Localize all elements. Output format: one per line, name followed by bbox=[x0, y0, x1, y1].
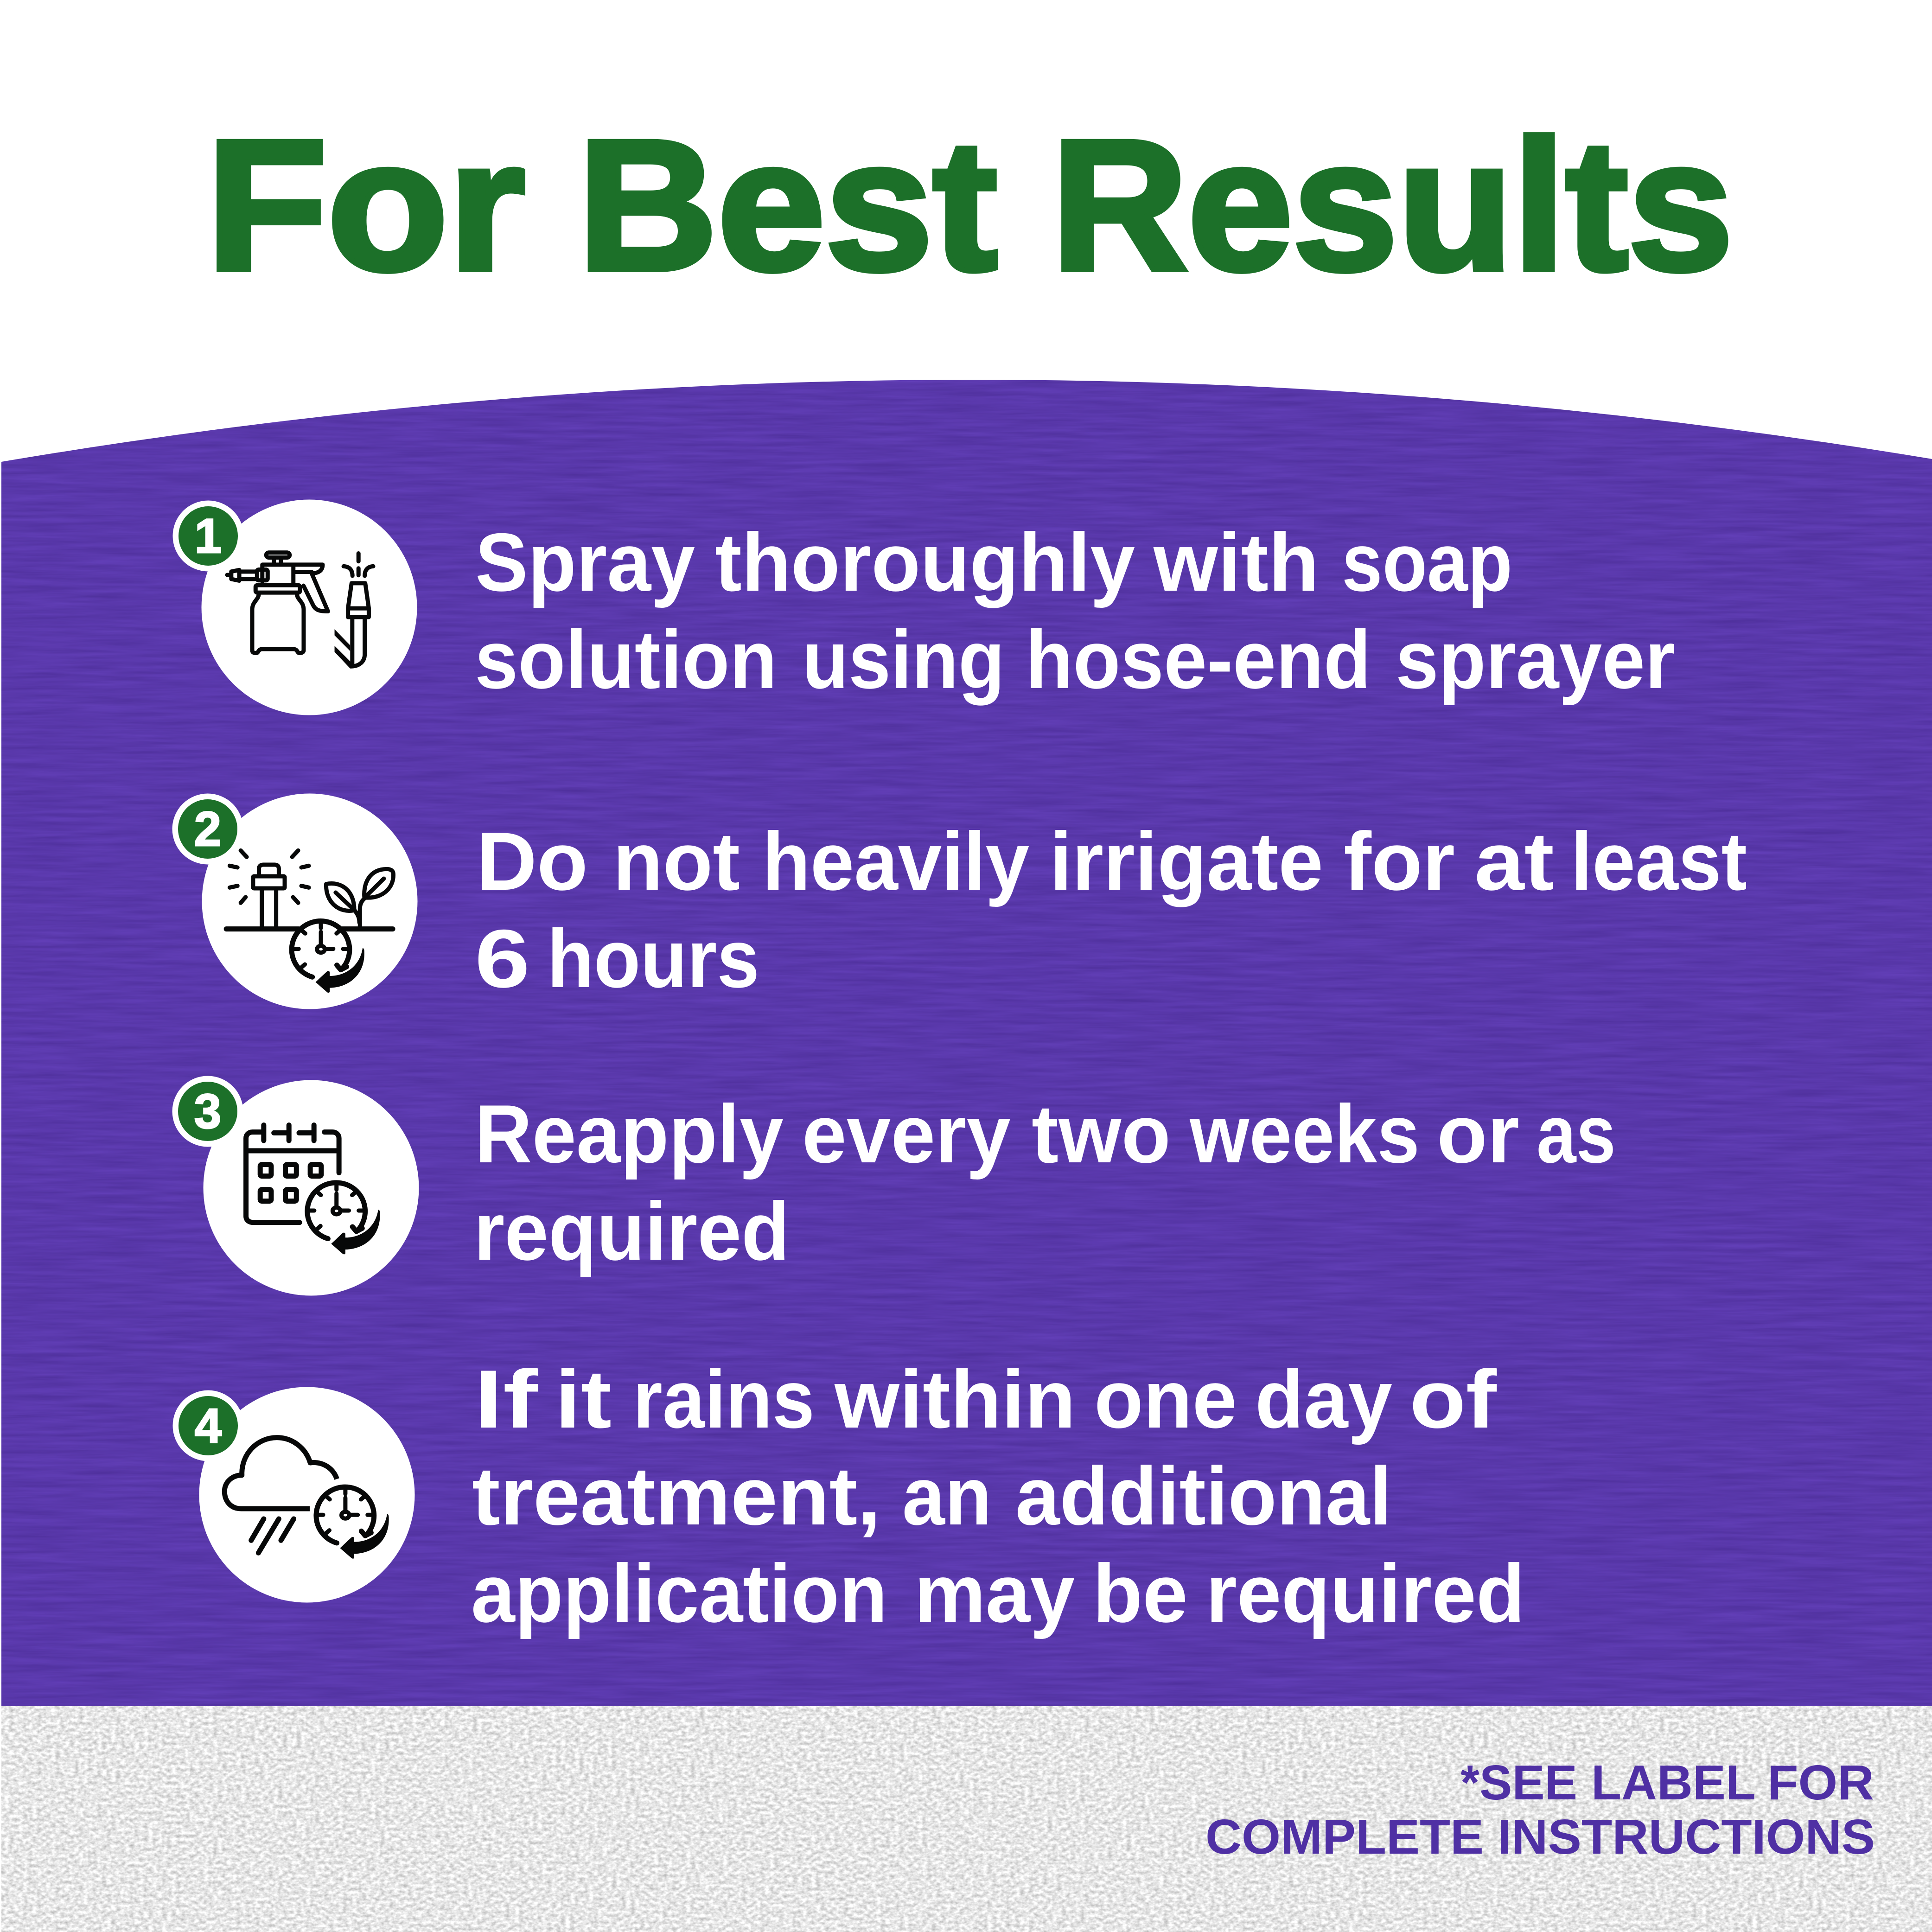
title: Results bbox=[1052, 102, 1733, 309]
step 3 text: Reapply bbox=[475, 1088, 784, 1180]
footnote bbox=[1205, 1755, 1875, 1864]
step 3 text: as bbox=[1537, 1088, 1616, 1180]
step 4 text: an bbox=[902, 1450, 992, 1542]
badge: step 1: 1 bbox=[195, 509, 222, 563]
step 2 text: hours bbox=[547, 912, 759, 1005]
step 2 text: least bbox=[1571, 815, 1747, 907]
step 2 text: for bbox=[1344, 815, 1455, 907]
step 4 text: within bbox=[834, 1353, 1076, 1445]
badge: step 4: 4 bbox=[195, 1399, 222, 1453]
footnote: LABEL bbox=[1591, 1755, 1756, 1810]
footnote: COMPLETE bbox=[1205, 1810, 1484, 1864]
footnote: FOR bbox=[1767, 1755, 1874, 1810]
step 4 text: of bbox=[1409, 1353, 1497, 1445]
step 2 text: at bbox=[1474, 815, 1554, 907]
step 4 text bbox=[471, 1353, 1525, 1639]
step 3 text bbox=[474, 1088, 1616, 1277]
step 4 text: be bbox=[1093, 1547, 1188, 1639]
panel: textured footer background bbox=[1, 1706, 1932, 1932]
step 4 text: If bbox=[474, 1353, 538, 1445]
badge: step 4 bbox=[172, 1390, 244, 1461]
icon: calendar and clock bbox=[246, 1125, 380, 1254]
badge: step 3: 3 bbox=[194, 1084, 221, 1139]
title: Best bbox=[578, 102, 997, 309]
badge: step 2 bbox=[172, 794, 243, 864]
step 3 text: two bbox=[1032, 1088, 1171, 1180]
step 4 text: required bbox=[1206, 1547, 1525, 1639]
step 1 text: solution bbox=[475, 613, 777, 706]
icon: rain cloud and clock bbox=[224, 1438, 389, 1559]
step 2 text: irrigate bbox=[1050, 815, 1323, 907]
footnote: INSTRUCTIONS bbox=[1498, 1810, 1875, 1864]
icon: sprinkler, plant and clock bbox=[226, 850, 393, 993]
step 1 text: sprayer bbox=[1396, 613, 1675, 706]
step 4 text: application bbox=[471, 1547, 887, 1639]
step 1 text: soap bbox=[1342, 516, 1512, 608]
title: For bbox=[206, 102, 525, 309]
step 4 text: rains bbox=[633, 1353, 815, 1445]
footnote: *SEE bbox=[1460, 1755, 1577, 1810]
step 2 text: 6 bbox=[475, 912, 530, 1005]
step 1 text bbox=[475, 516, 1675, 706]
step 2 text: not bbox=[613, 815, 740, 907]
step 4 text: one bbox=[1094, 1353, 1237, 1445]
step 1 icon: sprayer bbox=[201, 500, 417, 715]
step 1 text: thoroughly bbox=[715, 516, 1135, 608]
icon: pump sprayer and hose-end nozzle bbox=[227, 553, 373, 669]
step 4 icon: rain bbox=[199, 1387, 414, 1602]
badge: step 2: 2 bbox=[194, 802, 221, 856]
step 2 icon: irrigation bbox=[202, 794, 417, 1009]
step 1 text: with bbox=[1153, 516, 1319, 608]
step 4 text: may bbox=[914, 1547, 1075, 1639]
badge: step 1 bbox=[172, 501, 244, 571]
step 3 text: weeks bbox=[1189, 1088, 1420, 1180]
step 4 text: it bbox=[555, 1353, 612, 1445]
step 1 text: using bbox=[802, 613, 1005, 706]
step 1 text: Spray bbox=[475, 516, 695, 608]
step 1 text: hose-end bbox=[1026, 613, 1371, 706]
panel: purple instructions background bbox=[0, 371, 1932, 1706]
step 3 text: or bbox=[1437, 1088, 1519, 1180]
step 2 text: Do bbox=[477, 815, 588, 907]
step 2 text bbox=[475, 815, 1747, 1005]
badge: step 3 bbox=[172, 1076, 243, 1147]
step 4 text: day bbox=[1255, 1353, 1392, 1445]
step 4 text: treatment, bbox=[472, 1450, 881, 1542]
title bbox=[206, 102, 1733, 309]
step 2 text: heavily bbox=[762, 815, 1029, 907]
step 4 text: additional bbox=[1015, 1450, 1392, 1542]
step 3 text: every bbox=[802, 1088, 1011, 1180]
step 3 text: required bbox=[474, 1185, 790, 1277]
step 3 icon: calendar bbox=[203, 1080, 419, 1295]
